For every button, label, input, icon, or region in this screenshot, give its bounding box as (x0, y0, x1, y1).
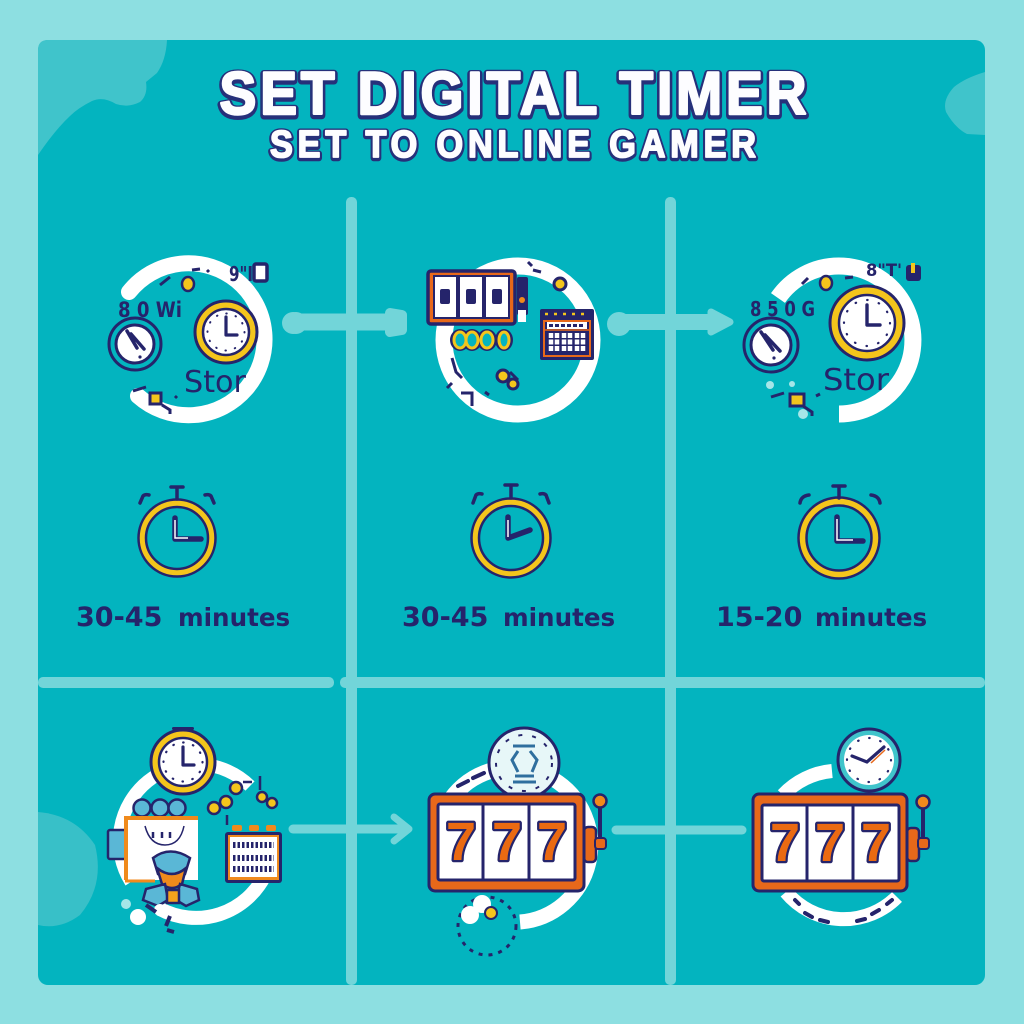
icon: slot machine 777 (753, 794, 930, 891)
icon: frosted clock (489, 728, 559, 798)
progress ring (444, 266, 592, 414)
panel: step 1 illustration (109, 262, 267, 415)
duration label 3: 15-20 (716, 602, 802, 633)
duration label 2: 30-45 (402, 602, 488, 633)
icon: coin cluster (208, 776, 277, 825)
icon: dotted circle with tokens (458, 895, 516, 955)
duration label 2: minutes (503, 603, 615, 632)
panel: step 2 illustration (428, 262, 594, 414)
panel: step 5 illustration (429, 728, 606, 955)
ring dashes (795, 900, 892, 922)
title line 1: SET DIGITAL TIMER (220, 62, 806, 129)
icon: schedule card (225, 825, 282, 883)
stopwatch 1 (138, 487, 216, 576)
scribble text: Stor (184, 365, 247, 400)
icon: large clock (830, 286, 904, 360)
stopwatch 3 (798, 486, 880, 578)
icon: wall clock (838, 729, 900, 791)
duration label 1: 30-45 (76, 602, 162, 633)
duration label 3: minutes (815, 603, 927, 632)
duration label 1: minutes (178, 603, 290, 632)
panel: step 4 illustration (108, 727, 282, 932)
scribble marks: 8"T' (866, 261, 902, 281)
icon: slot machine 777: 7 (446, 812, 476, 872)
arrow: bottom row 2 to 3 (616, 826, 742, 834)
title (220, 61, 806, 166)
icon: slot machine 777 (429, 794, 606, 891)
progress ring (129, 263, 265, 415)
arrow: bottom row 1 to 2 (293, 817, 409, 841)
arrow: top row 2 to 3 (607, 312, 730, 336)
progress ring (451, 771, 490, 799)
scribble text: Stor (823, 363, 890, 398)
icon: gold tokens (447, 262, 566, 406)
scribble marks: 9"I (229, 262, 253, 286)
progress ring (778, 266, 913, 414)
scribble marks (771, 261, 921, 416)
scribble text: 8 0 Wi (118, 298, 182, 322)
icon: monitor with figure (108, 800, 199, 906)
icon: slot machine 777: 7 (492, 812, 522, 872)
stopwatch 2 (472, 485, 550, 578)
splatter (121, 899, 174, 932)
icon: coins (450, 329, 513, 351)
icon: slot machine 777: 7 (815, 813, 845, 873)
icon: large clock (195, 301, 257, 363)
icon: small clock (109, 318, 161, 370)
grid dividers (38, 197, 985, 985)
icon: slot machine 777: 7 (770, 813, 800, 873)
splatter (766, 381, 808, 419)
icon: timer clock (151, 727, 215, 794)
icon: slot machine 777: 7 (861, 813, 891, 873)
panel: step 6 illustration (753, 729, 930, 922)
arrow: top row 1 to 2 (282, 312, 402, 334)
icon: small clock (744, 318, 798, 372)
icon: slot machine small (428, 271, 528, 324)
title line 2: SET TO ONLINE GAMER (270, 122, 756, 165)
scribble marks (133, 262, 267, 414)
scribble text: 8 5 0 G (750, 297, 815, 321)
icon: slot machine 777: 7 (537, 812, 567, 872)
panel: step 3 illustration (744, 261, 921, 419)
title line 1: SET DIGITAL TIMER (220, 61, 806, 128)
icon: schedule card (540, 309, 594, 360)
progress ring (119, 764, 250, 882)
title line 2: SET TO ONLINE GAMER (270, 123, 756, 166)
progress ring (783, 771, 832, 795)
